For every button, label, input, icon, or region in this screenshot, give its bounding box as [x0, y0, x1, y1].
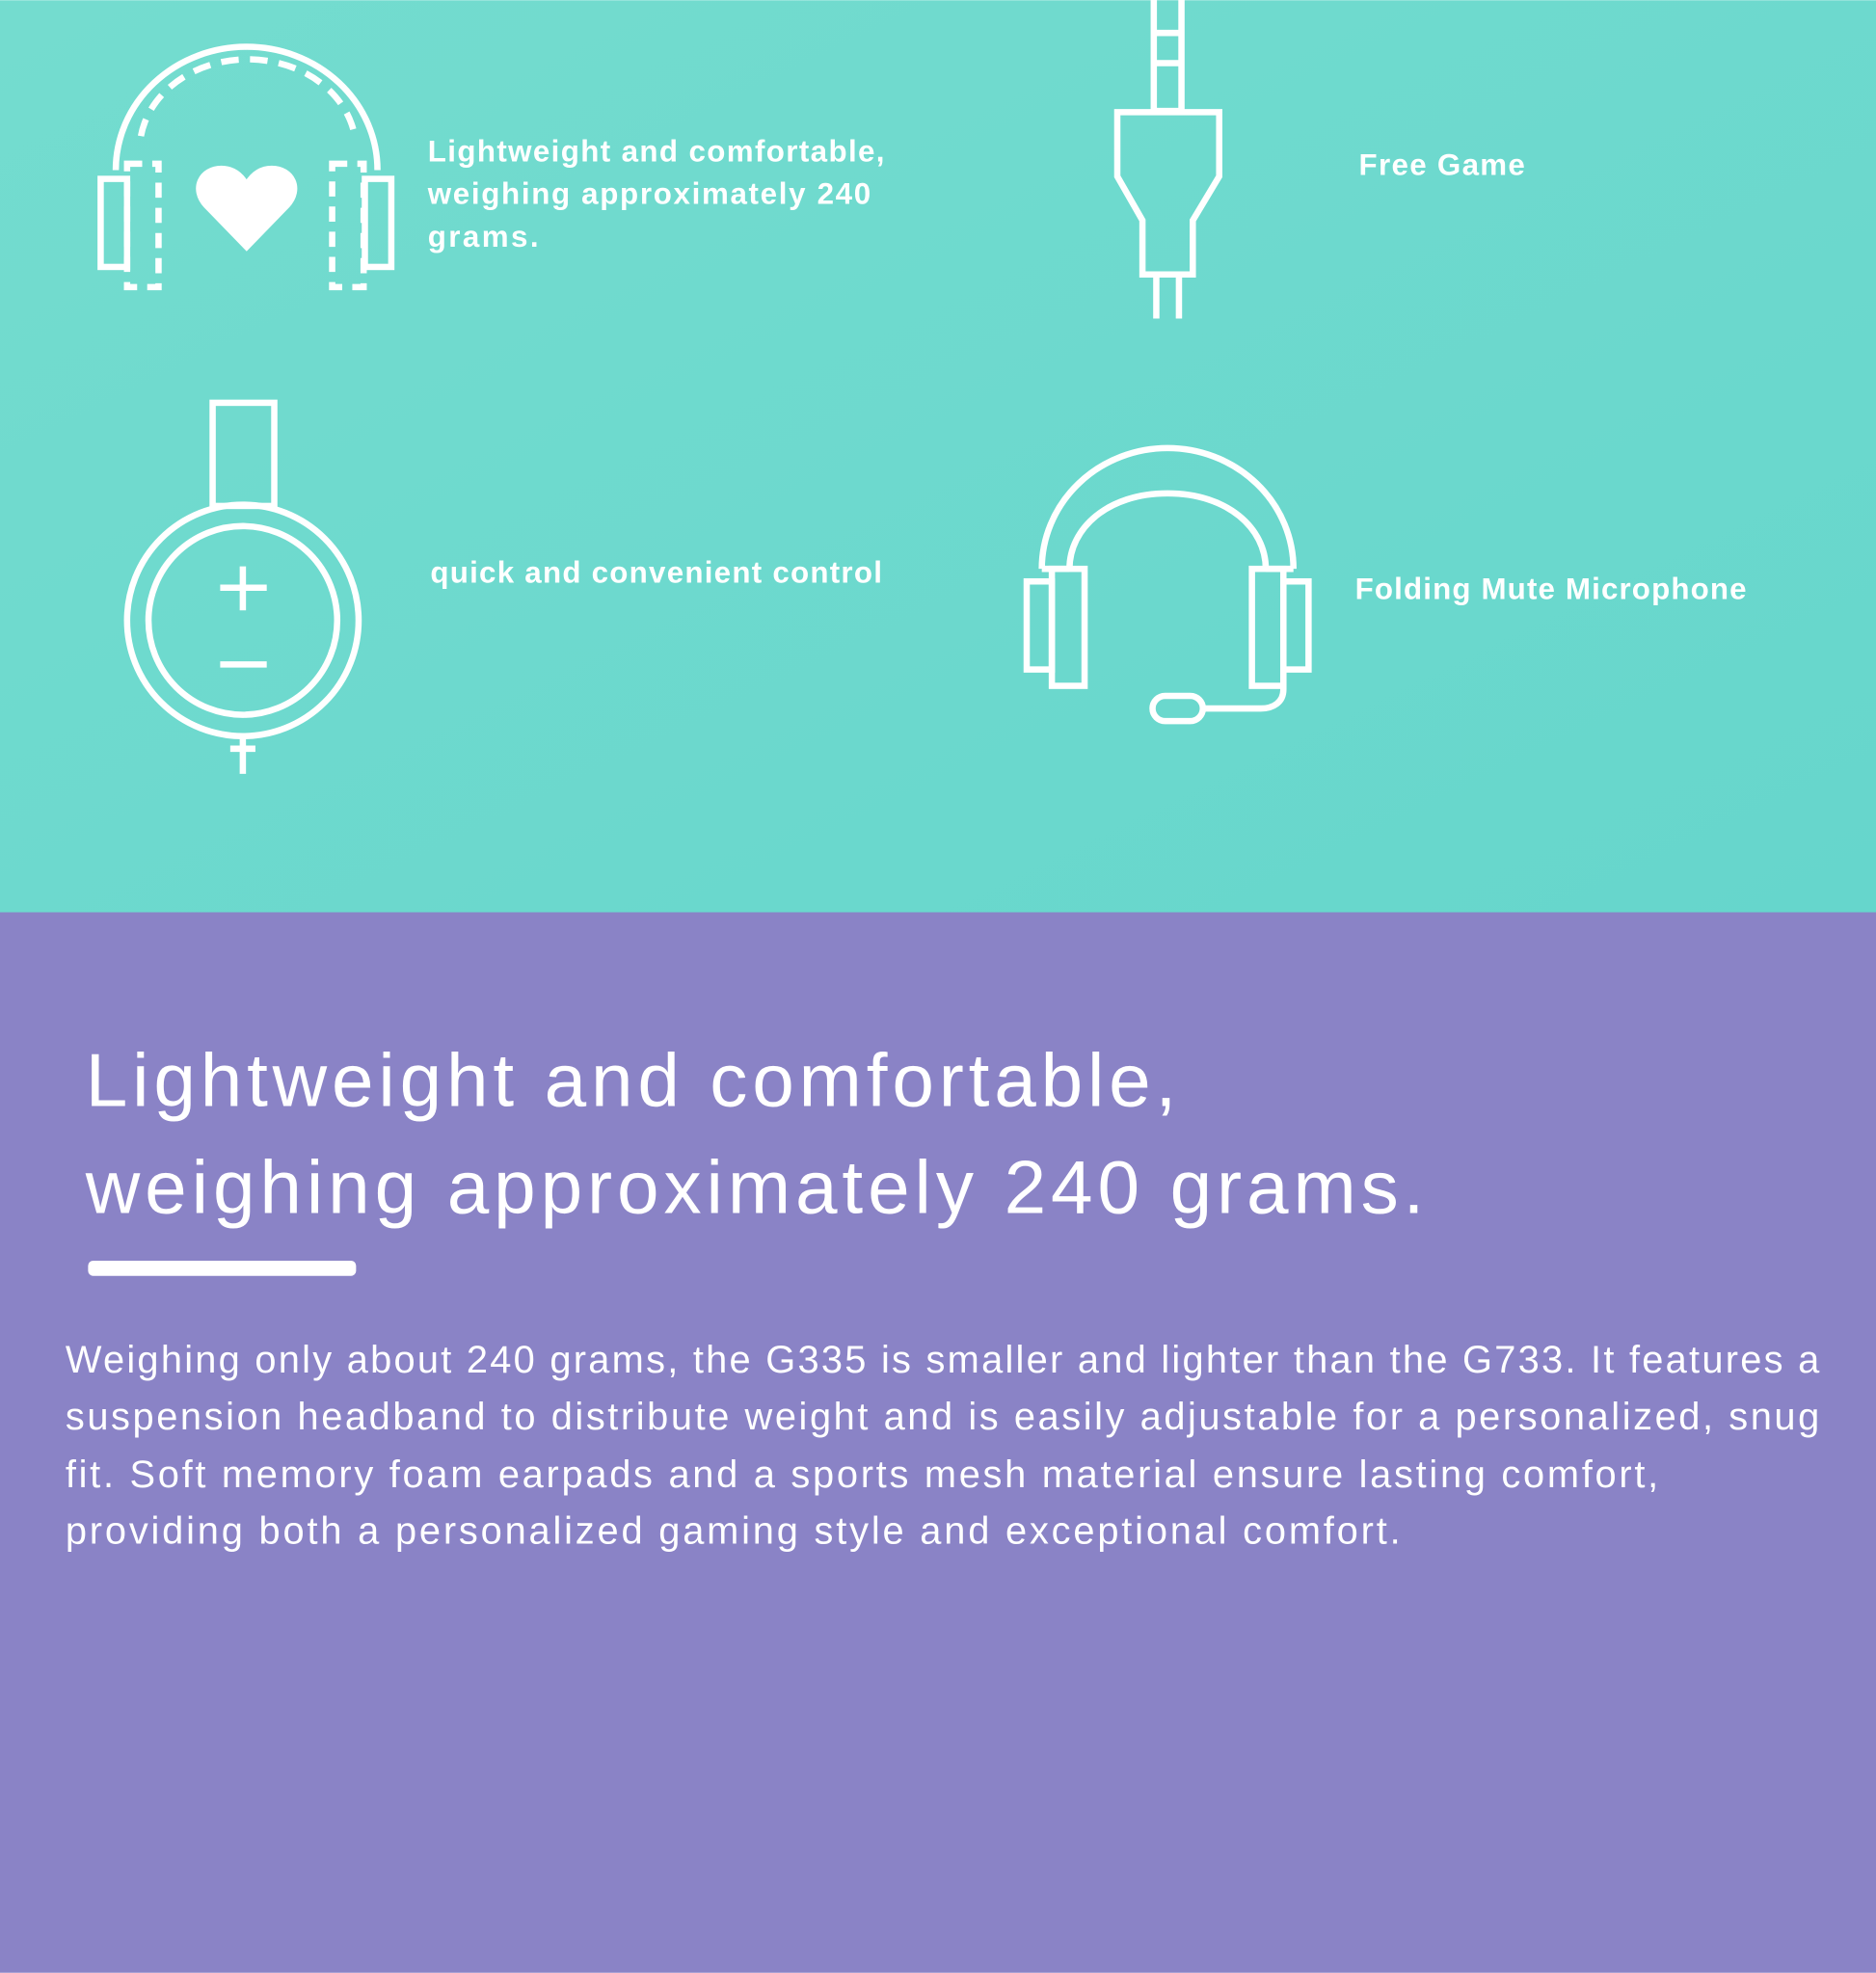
panel: purple description [0, 912, 1876, 1973]
text: lightweight: grams. [428, 220, 539, 253]
text: folding mute microphone: Folding Mute Microphone [1355, 573, 1747, 606]
icon: volume control [127, 403, 359, 774]
heading: weighing approximately 240 grams. [85, 1144, 1424, 1229]
icon: headphones with heart [100, 47, 391, 287]
text: quick control: quick and convenient control [430, 556, 882, 590]
icon: audio plug [1117, 0, 1219, 318]
heading: Lightweight and comfortable, [86, 1037, 1176, 1122]
body text: fit. Soft memory foam earpads and a sports mesh material ensure lasting comfort, [66, 1453, 1658, 1496]
text: lightweight: weighing approximately 240 [427, 177, 871, 211]
heading [85, 1037, 1424, 1229]
icon: headset with microphone [1027, 448, 1308, 721]
body text: Weighing only about 240 grams, the G335 is smaller and lighter than the G733. It features a [66, 1339, 1820, 1381]
text: lightweight: Lightweight and comfortable, [428, 134, 885, 168]
panel: teal features [0, 0, 1876, 912]
body text: providing both a personalized gaming style and exceptional comfort. [66, 1510, 1401, 1553]
text: free game: Free Game [1359, 148, 1525, 182]
text: lightweight [427, 134, 885, 253]
body text [66, 1339, 1820, 1553]
body text: suspension headband to distribute weight and is easily adjustable for a personalized, snug [66, 1396, 1819, 1438]
underline bar [88, 1261, 356, 1276]
